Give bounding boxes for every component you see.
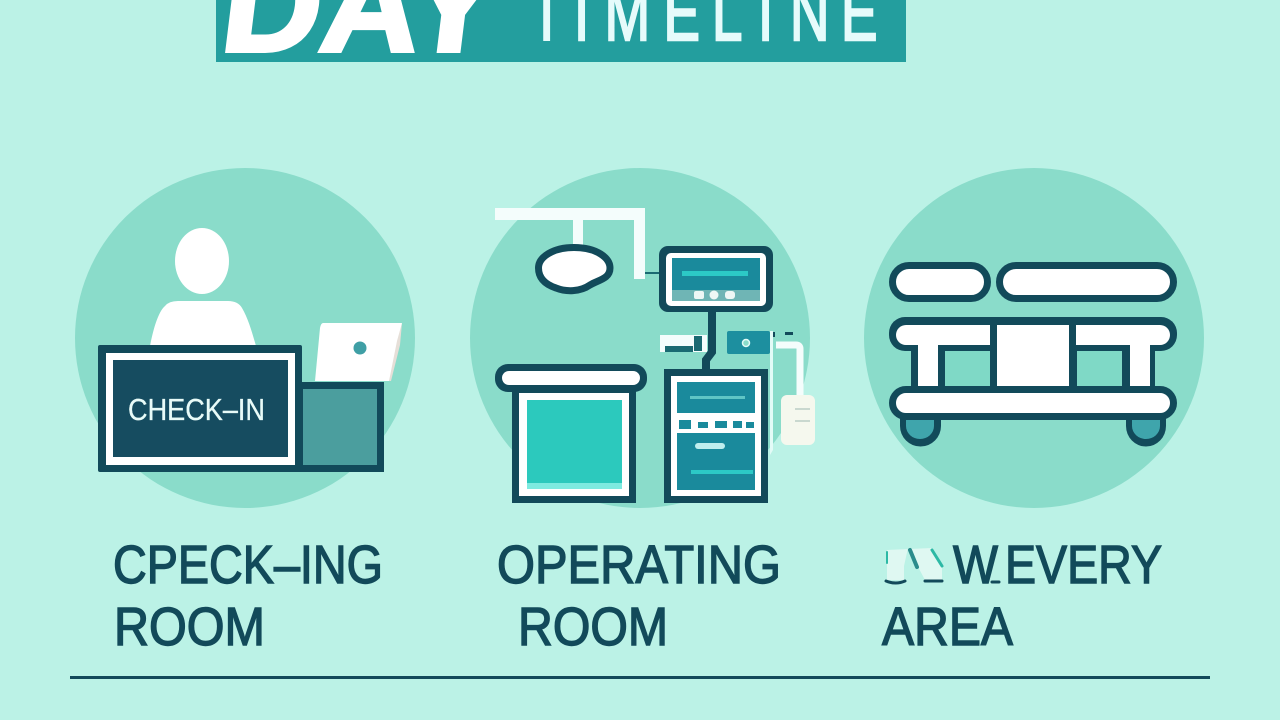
frame bbox=[889, 317, 1177, 395]
sign text: CHECK–IN bbox=[128, 392, 265, 427]
label: check-in room: ROOM bbox=[114, 597, 265, 657]
label: check-in room bbox=[113, 535, 383, 657]
lower rail bbox=[892, 390, 1174, 416]
top cushion right bbox=[1000, 266, 1174, 298]
icon: equipment cabinet bbox=[664, 369, 768, 503]
label: recovery area: AREA bbox=[882, 597, 1013, 657]
label: recovery area: EVERY bbox=[1005, 535, 1162, 595]
icon: laptop bbox=[315, 323, 402, 381]
label: check-in room: CPECK–ING bbox=[113, 535, 383, 595]
panel: check-in bbox=[75, 168, 415, 508]
circle backdrop bbox=[470, 168, 810, 508]
label: operating room: OPERATING bbox=[497, 535, 781, 595]
wheels bbox=[900, 415, 1166, 446]
icon: monitor bbox=[659, 246, 773, 312]
circle backdrop bbox=[864, 168, 1204, 508]
title banner bbox=[215, 0, 906, 79]
icon: check-in desk sign bbox=[98, 345, 302, 472]
label: operating room: ROOM bbox=[518, 597, 668, 657]
label: recovery area: W bbox=[953, 535, 998, 595]
circle backdrop bbox=[75, 168, 415, 508]
icon: side desk bbox=[298, 382, 384, 472]
icon: side arm and controls bbox=[660, 312, 815, 455]
label: operating room bbox=[497, 535, 781, 657]
label: recovery area bbox=[882, 535, 1162, 657]
icon: stretcher bbox=[889, 266, 1177, 446]
icon: ceiling lamp bbox=[495, 208, 659, 291]
panel: recovery area bbox=[864, 168, 1204, 508]
icon: person bbox=[150, 228, 256, 346]
garbled ghost letters bbox=[886, 548, 999, 583]
icon: operating table bbox=[495, 364, 647, 503]
top cushion left bbox=[892, 266, 988, 298]
panel: operating room bbox=[470, 168, 815, 508]
